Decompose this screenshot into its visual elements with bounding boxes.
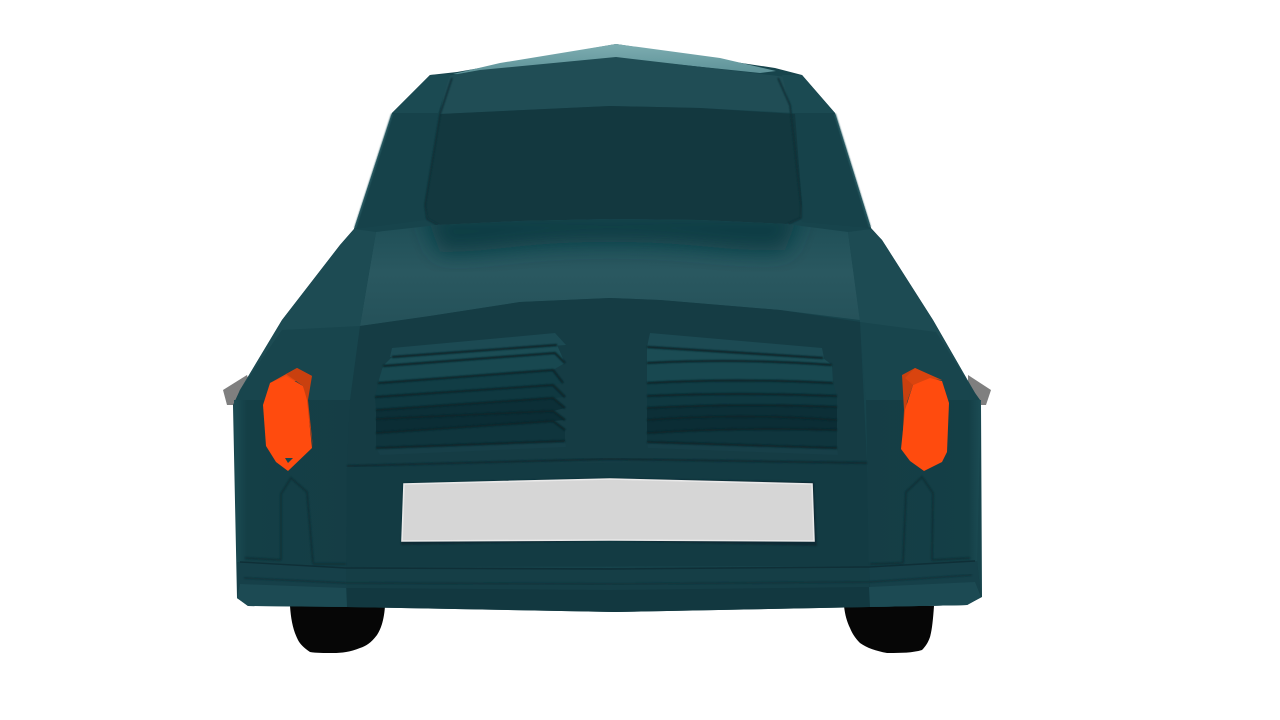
right grille bbox=[647, 333, 838, 455]
cab edge highlights bbox=[355, 114, 870, 228]
right fender upper bbox=[848, 229, 980, 400]
cab side left top bbox=[392, 74, 450, 114]
mirrors bbox=[223, 375, 991, 405]
cab side left bbox=[354, 113, 438, 229]
windshield pillar lines bbox=[425, 78, 801, 225]
left lamp notch bbox=[285, 458, 293, 463]
right mirror bbox=[968, 375, 991, 405]
left fender band bbox=[236, 326, 360, 400]
left grille shadow lines bbox=[375, 345, 565, 448]
bumper left end bbox=[237, 562, 347, 607]
right grille top louvre bbox=[647, 333, 824, 358]
panel seam bbox=[347, 459, 867, 466]
front bumper bbox=[237, 561, 981, 612]
hood bbox=[360, 219, 860, 326]
lower face panel bbox=[346, 460, 869, 567]
right side trim bbox=[870, 477, 970, 564]
left lamp face bbox=[263, 376, 312, 471]
right wheel bbox=[844, 606, 934, 653]
body silhouette bbox=[233, 44, 982, 612]
left grille bbox=[375, 333, 566, 455]
bumper right lower bbox=[869, 582, 981, 607]
bumper right end bbox=[869, 561, 981, 607]
hood shadow under windshield bbox=[425, 212, 800, 252]
left grille slats bbox=[383, 345, 565, 366]
roof light strip bbox=[453, 44, 776, 75]
left fender upper bbox=[236, 229, 376, 400]
bumper left lower bbox=[237, 584, 347, 607]
plate bbox=[402, 479, 814, 541]
left fender bbox=[234, 400, 350, 567]
hood front panel bbox=[347, 298, 867, 466]
right fender bbox=[866, 400, 981, 566]
license plate bbox=[401, 478, 817, 546]
cab side right bbox=[792, 113, 871, 228]
cab side right top bbox=[782, 75, 835, 114]
bumper seams bbox=[240, 561, 975, 584]
right fender band bbox=[860, 322, 980, 400]
right lamp top bbox=[905, 368, 942, 385]
wheels bbox=[290, 606, 934, 653]
left mirror bbox=[223, 375, 250, 405]
bumper upper band bbox=[346, 567, 869, 590]
left grille top louvre bbox=[390, 333, 566, 357]
right grille shadow lines bbox=[647, 347, 837, 448]
left lamp top bbox=[270, 368, 312, 383]
windshield bbox=[425, 106, 802, 225]
right lamp side bbox=[902, 368, 932, 450]
right headlight bbox=[901, 368, 949, 471]
left lamp side bbox=[286, 368, 313, 448]
right lamp face bbox=[901, 378, 949, 471]
left headlight bbox=[263, 368, 313, 471]
roof band bbox=[440, 57, 795, 114]
illustration: low-poly teal car seen from the front bbox=[223, 44, 991, 653]
car body bbox=[233, 44, 982, 612]
left side trim bbox=[245, 478, 346, 564]
left wheel bbox=[290, 606, 385, 653]
plate recess bbox=[401, 478, 817, 546]
right grille slats bbox=[647, 347, 832, 365]
